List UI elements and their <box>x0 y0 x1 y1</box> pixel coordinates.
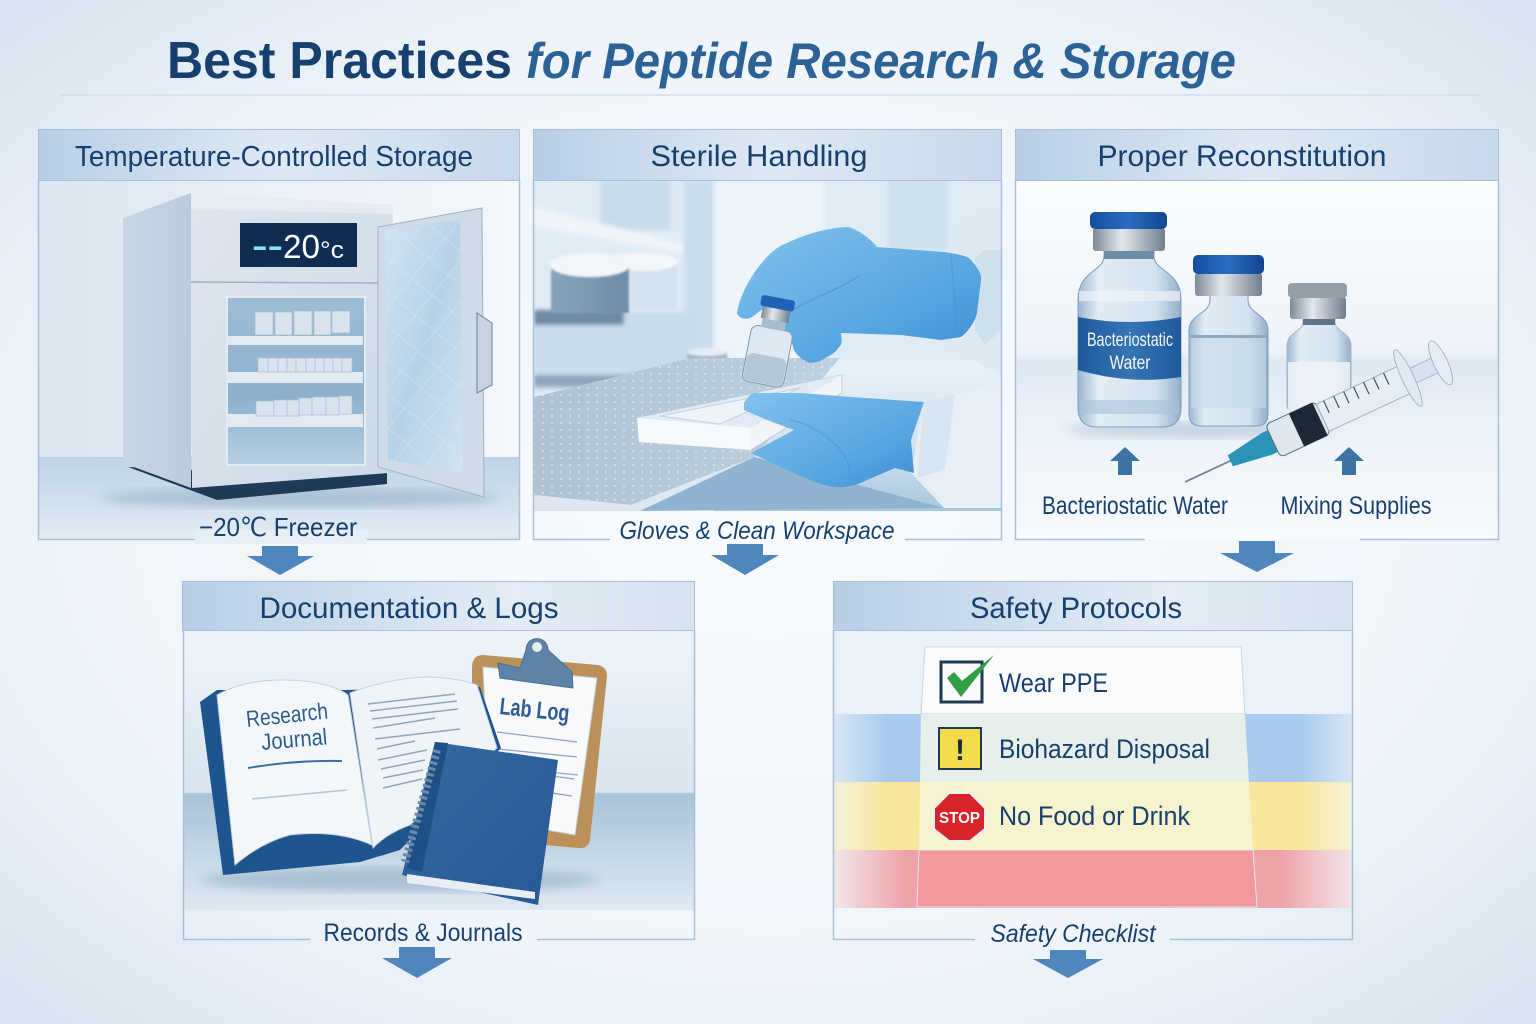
panel 3 header: Proper Reconstitution <box>1098 140 1386 173</box>
panel 5 header: Safety Protocols <box>970 592 1182 625</box>
glove folds <box>790 255 955 312</box>
arrow: panel 4 <box>382 947 452 978</box>
panel 2 caption: Gloves & Clean Workspace <box>620 517 894 545</box>
sample tray <box>637 375 842 450</box>
item: wear PPE <box>941 655 1108 702</box>
arrow: panel 5 <box>1033 950 1103 978</box>
panel: sterile handling <box>534 130 1002 545</box>
vial: bacteriostatic water: Water <box>1110 353 1151 374</box>
arrow: water <box>1110 447 1140 475</box>
arrow: panel 2 <box>711 544 779 575</box>
lower glove <box>744 393 924 487</box>
panel 1 header <box>38 130 520 180</box>
panel: proper reconstitution <box>1016 130 1498 540</box>
item: biohazard disposal: ! <box>955 734 965 767</box>
panel 3 header <box>1016 130 1498 180</box>
panel 5 caption: Safety Checklist <box>990 920 1156 948</box>
panel 3 illustration <box>1016 180 1498 540</box>
vial: bacteriostatic water <box>1078 212 1181 427</box>
freezer display: 20 <box>283 228 320 265</box>
title <box>167 32 1236 90</box>
door handle <box>477 313 492 393</box>
item: no food or drink: No Food or Drink <box>999 801 1190 831</box>
arrow: supplies <box>1334 447 1364 475</box>
item: biohazard disposal <box>939 728 1210 769</box>
freezer display: °c <box>320 237 344 264</box>
panel 4 illustration <box>184 630 695 910</box>
panel: documentation and logs <box>182 582 695 947</box>
blue notebook <box>402 742 558 905</box>
panel 4 caption: Records & Journals <box>324 919 522 947</box>
vial: medium <box>1189 255 1268 426</box>
title: for Peptide Research & Storage <box>526 33 1236 89</box>
panel 1 illustration <box>39 180 519 540</box>
panel 2 header <box>534 130 1002 180</box>
sleeves <box>911 250 1001 508</box>
panel 2 illustration <box>534 180 1001 511</box>
vial: bacteriostatic water: Bacteriostatic <box>1087 330 1173 351</box>
item: wear PPE: Wear PPE <box>999 668 1108 698</box>
vial <box>742 295 795 388</box>
clipboard: Lab Log <box>498 693 571 727</box>
label: bacteriostatic water: Bacteriostatic Water <box>1042 492 1228 520</box>
panel 4 header <box>182 582 694 630</box>
panel 1 header: Temperature-Controlled Storage <box>75 141 473 173</box>
checklist sheet <box>917 647 1257 907</box>
arrow: panel 1 <box>247 546 314 575</box>
panel: temperature-controlled storage <box>38 130 520 544</box>
counter <box>534 358 944 511</box>
arrow: panel 3 <box>1220 541 1294 572</box>
freezer door <box>378 208 492 497</box>
item: biohazard disposal: Biohazard Disposal <box>999 734 1210 764</box>
panel 1 caption: −20℃ Freezer <box>199 512 357 542</box>
item: no food or drink: STOP <box>939 810 980 827</box>
vial: small <box>1287 283 1351 413</box>
freezer display: -- <box>252 230 283 263</box>
clipboard <box>472 639 607 848</box>
panel 4 header: Documentation & Logs <box>260 592 558 625</box>
freezer display <box>240 223 357 267</box>
freezer window and shelves <box>227 297 365 465</box>
item: no food or drink <box>934 793 1190 841</box>
lab machine <box>550 253 727 367</box>
upper glove <box>737 227 981 363</box>
title: Best Practices <box>167 32 512 90</box>
icon: freezer <box>123 193 492 500</box>
panel 2 header: Sterile Handling <box>650 140 868 173</box>
panel 5 header <box>834 582 1352 630</box>
open research journal: Journal <box>260 723 328 755</box>
open research journal: Research <box>245 698 329 732</box>
panel 5 illustration <box>834 630 1353 908</box>
panel: safety protocols <box>834 582 1353 948</box>
syringe <box>1184 340 1453 483</box>
label: mixing supplies: Mixing Supplies <box>1280 492 1432 520</box>
open research journal <box>200 677 501 875</box>
